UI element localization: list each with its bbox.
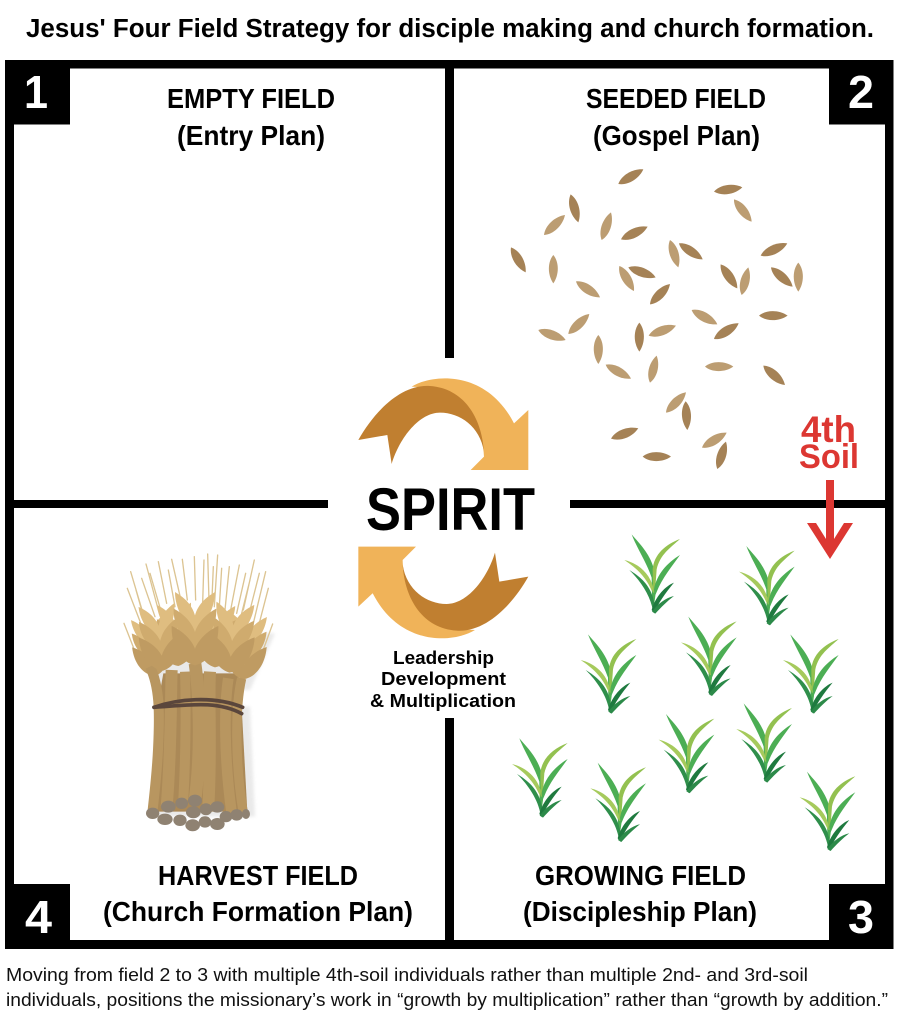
scattered seeds (507, 165, 803, 470)
footnote: Moving from field 2 to 3 with multiple 4th-soil individuals rather than multiple 2nd- and 3rd-soil (6, 964, 808, 985)
panel 4: harvest field (5, 508, 445, 949)
heading: harvest field: (Church Formation Plan) (103, 896, 413, 927)
heading: growing field: (Discipleship Plan) (523, 896, 757, 927)
heading: empty field: (Entry Plan) (177, 120, 325, 151)
heading: harvest field: HARVEST FIELD (158, 860, 358, 891)
wheat sheaf (124, 554, 275, 831)
number badge 1 (5, 60, 70, 124)
green seedlings (512, 534, 855, 851)
panel 1: empty field (5, 60, 445, 500)
heading: empty field (167, 83, 335, 151)
caption: leadership development: Leadership (393, 647, 494, 668)
caption: leadership development: Development (381, 668, 506, 689)
number badge 2 (829, 60, 894, 124)
number badge 2: 2 (848, 66, 874, 118)
heading: empty field: EMPTY FIELD (167, 83, 335, 114)
number badge 3 (829, 884, 894, 949)
cycle arrow: top (358, 378, 528, 470)
4th soil label: Soil (799, 438, 859, 476)
arrow: red down arrow (807, 480, 853, 559)
number badge 4 (5, 884, 70, 949)
caption: leadership development: & Multiplication (370, 690, 516, 711)
cycle arrow: bottom (358, 547, 528, 638)
heading: seeded field (586, 83, 766, 151)
4th soil label: 4th (801, 409, 856, 450)
number badge 1: 1 (24, 66, 48, 118)
caption: leadership development (370, 647, 516, 711)
footnote: individuals, positions the missionary’s work in “growth by multiplication” rather than “growth by addition.” (6, 989, 888, 1010)
number badge 3: 3 (848, 891, 874, 943)
panel 3: growing field (454, 508, 894, 949)
centre: spirit cycle (328, 358, 570, 718)
panel 2: seeded field (454, 60, 894, 500)
title: Jesus' Four Field Strategy for disciple making and church formation. (26, 15, 874, 43)
heading: harvest field (103, 860, 413, 927)
number badge 4: 4 (25, 891, 52, 943)
heading: seeded field: (Gospel Plan) (593, 120, 760, 151)
4th soil label (799, 409, 859, 476)
heading: seeded field: SEEDED FIELD (586, 83, 766, 114)
footnote (6, 964, 888, 1010)
heading: growing field (523, 860, 757, 927)
word: SPIRIT: SPIRIT (366, 476, 535, 543)
heading: growing field: GROWING FIELD (535, 860, 746, 891)
